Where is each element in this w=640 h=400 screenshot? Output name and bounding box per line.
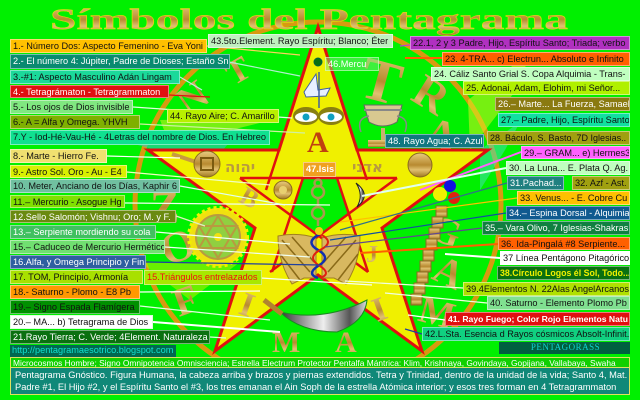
icon: winged caduceus (278, 227, 360, 284)
label 48 (385, 134, 484, 148)
gold letters around the circle: T (353, 44, 409, 118)
label 40 (487, 296, 630, 310)
label 7: 7.Y - Iod-Hé-Vau-Hé - 4Letras del nombre de Dios. En Hebreo (13, 132, 266, 142)
label 15 triangles (144, 270, 262, 285)
label 28 (487, 131, 630, 145)
label 18 (10, 285, 140, 299)
translucent rays (120, 60, 530, 300)
label 13: 13.– Serpiente mordiendo su cola (13, 227, 150, 237)
label 30: 30. La Luna... E. Plata Q. Ag. (509, 163, 628, 173)
label 15: 15.– Caduceo de Mercurio Hermético (13, 242, 165, 252)
label 37 (500, 251, 630, 265)
label 32 (572, 176, 630, 190)
label 34 (506, 206, 630, 220)
lower purple arc (222, 361, 400, 388)
icon: right coin (408, 153, 432, 177)
label 47: 47.Isis (306, 164, 334, 174)
icon: chalice (360, 105, 406, 147)
label 8: 8.- Marte - Hierro Fe. (13, 151, 99, 161)
blog url: http://pentagramaesotrico.blogspot.com (12, 345, 173, 355)
label 10: 10. Meter, Anciano de los Días, Kaphir 6 (13, 181, 177, 191)
label 19 (10, 300, 140, 314)
label 26 (495, 97, 630, 111)
label 44 (167, 109, 279, 123)
label 27 (498, 113, 630, 127)
label 42: 42.L.Sta. Esencia d Rayos cósmicos Absolt-Infinit. (425, 329, 629, 339)
label 23: 23. 4-TRA... c) Electrun... Absoluto e Infinito (445, 54, 624, 64)
label 43 (208, 34, 393, 48)
gold letters around the circle: A (426, 246, 472, 299)
icon: left coin and key (172, 151, 220, 177)
label 28: 28. Báculo, S. Basto, 7D Iglesias.. (490, 133, 626, 143)
inner star lines (240, 150, 397, 272)
icon: green ball (314, 58, 322, 66)
label 39: 39.4Elementos N. 22Alas AngelArcanos (466, 284, 629, 294)
label 32: 32. Azf - Ast. (575, 178, 627, 188)
label 38: 38.Círculo Logos él Sol, Todo... (500, 268, 630, 278)
label 22: 22.1, 2 y 3 Padre, Hijo, Espíritu Santo; Triada; verbo (413, 38, 625, 48)
label 46 (325, 57, 379, 71)
label 21: 21.Rayo Tierra; C. Verde; 4Element. Naturaleza (13, 332, 208, 342)
gold glyphs inside the star: B (235, 181, 264, 215)
label 41 (445, 312, 630, 326)
gold letters around the circle: M (414, 288, 460, 338)
letter A: A (307, 126, 329, 159)
gold letters around the circle: A (421, 109, 463, 162)
label 16 (10, 255, 146, 269)
label 4: 4.- Tetragrámaton - Tetragrammaton (13, 87, 160, 97)
gold letters around the circle (150, 44, 472, 359)
hebrew name left: יהוה (225, 158, 255, 176)
label 27: 27.– Padre, Hijo, Espíritu Santo (501, 115, 630, 125)
description panel (10, 367, 630, 395)
label 17 (10, 270, 143, 284)
label 3 (10, 70, 180, 84)
label 23 (442, 52, 630, 66)
label 30 (506, 161, 630, 175)
icon: ring chain (312, 180, 324, 226)
label 1 (10, 39, 207, 53)
label 36: 36. Ida-Pingalá #8 Serpiente... (501, 239, 625, 249)
gold letters around the circle: G (425, 207, 467, 257)
label 6: 6.- A = Alfa y Omega. YHVH (13, 117, 127, 127)
icon: bead chain (411, 206, 447, 305)
label 20: 20.– MA... b) Tetragrama de Dios (13, 317, 148, 327)
label 38 (497, 266, 630, 280)
central pentagon (291, 178, 349, 234)
label 35 (482, 221, 630, 235)
mantra strip: Microcosmos Hombre; Signo Omnipotencia Omnisciencia; Estrella Electrum Protector Pentalfa Mántrica: Klim, Krishnaya, Govindaya, Gopijana, Vallabaya, Swaha (13, 358, 616, 368)
star body (148, 27, 488, 351)
gold letters around the circle: R (404, 64, 460, 125)
icon: crescent (356, 183, 364, 207)
icon: seal of Solomon (189, 208, 247, 266)
pointer lines (107, 44, 521, 338)
gold letters around the circle: A (335, 326, 357, 359)
label 5: 5.- Los ojos de Dios invisible (13, 102, 129, 112)
label 22 (410, 36, 630, 50)
label 25 (463, 81, 630, 95)
description panel: Padre #1, El Hijo #2, y el Espíritu Santo el #3, los tres emanan el Ain Soph de la estrella Atómica interior; y esos tres forman en 4 Tetragrammaton (15, 382, 616, 392)
description panel: Pentagrama Gnóstico. Figura Humana, la cabeza arriba y brazos y piernas extendidos. Tetra y Trinidad, dentro de la unidad de la vida; Santo 4, Mat. (15, 370, 627, 380)
gold glyphs inside the star (234, 181, 392, 330)
label 10 (10, 179, 180, 193)
title: Símbolos del Pentagrama (50, 3, 568, 36)
gold glyphs inside the star: I (367, 290, 392, 330)
label 25: 25. Adonai, Adam, Elohim, mi Señor... (466, 83, 620, 93)
label 16: 16.Alfa, y Omega Principio y Fin (13, 257, 144, 267)
label 47 (303, 162, 336, 177)
label 17: 17. TOM, Principio, Armonía (13, 272, 128, 282)
gold glyphs inside the star: J (366, 242, 378, 268)
label 6 (10, 115, 140, 129)
label 40: 40. Saturno - Elemento Plomo Pb (490, 298, 627, 308)
label 21 (10, 330, 210, 344)
hebrew name right: אדני (352, 158, 383, 176)
label 41: 41. Rayo Fuego; Color Rojo Elementos Natu (448, 314, 628, 324)
label 43: 43.5to.Element. Rayo Espíritu; Blanco; Éter (211, 36, 388, 46)
label 2 (10, 54, 230, 69)
label 24: 24. Cáliz Santo Grial S. Copa Alquimia - Trans- (434, 69, 626, 79)
label 29: 29.– GRAM... e) Hermes3 (524, 148, 630, 158)
gold letters around the circle: F (167, 275, 205, 326)
label 39 (463, 282, 630, 296)
label 31: 31.Pachad... (510, 178, 562, 188)
icon: small coin (274, 181, 292, 199)
label 24 (431, 67, 630, 81)
label 20 (10, 315, 153, 329)
label 2: 2.- El número 4: Júpiter, Padre de Dioses; Estaño Sn (13, 56, 229, 66)
label 34: 34.– Espina Dorsal - Alquimia (509, 208, 630, 218)
label 31 (507, 176, 564, 190)
label 26: 26.– Marte... La Fuerza, Samael (498, 99, 630, 109)
gold glyphs inside the star: I (234, 286, 260, 325)
gold letters around the circle: N (168, 71, 217, 124)
label 35: 35.– Vara Olivo, 7 Iglesias-Shakras (485, 223, 628, 233)
icon: eyes (293, 107, 344, 125)
label 8 (10, 149, 107, 163)
label 11: 11.– Mercurio - Asogue Hg (13, 197, 122, 207)
label 15 triangles: 15.Triángulos entrelazados (147, 272, 258, 282)
label 1: 1.- Número Dos: Aspecto Femenino - Eva Yoni (13, 41, 203, 51)
label 3: 3.-#1: Aspecto Masculino Adán Lingam (13, 72, 172, 82)
pentagorass tag (499, 342, 630, 354)
label 48: 48. Rayo Agua; C. Azul (388, 136, 482, 146)
label 33 (517, 191, 630, 205)
label 5 (10, 100, 133, 114)
gold letters around the circle: O (153, 218, 202, 276)
icon: flaming sword (264, 300, 367, 332)
label 7 (10, 130, 270, 145)
label 9: 9.- Astro Sol. Oro - Au - E4 (13, 167, 122, 177)
gold letters around the circle: Z (150, 183, 179, 232)
icon: number four (304, 72, 330, 108)
label 46: 46.Mercu (328, 59, 366, 69)
icon: three colour balls (433, 180, 460, 204)
label 13 (10, 225, 156, 239)
gold letters around the circle: T (219, 49, 258, 93)
label 18: 18.- Saturno - Plomo - E8 Pb (13, 287, 131, 297)
outer circle (135, 22, 501, 388)
pentagorass tag: PENTAGORASS (531, 342, 600, 352)
label 19: 19.– Signo Espada Flamígera (13, 302, 135, 312)
label 33: 33. Venus... - E. Cobre Cu (520, 193, 627, 203)
label 12: 12.Sello Salomón; Vishnu; Oro; M. y F. (13, 212, 171, 222)
label 44: 44. Rayo Aire; C. Amarillo (170, 111, 275, 121)
gold letters around the circle: M (272, 326, 300, 359)
